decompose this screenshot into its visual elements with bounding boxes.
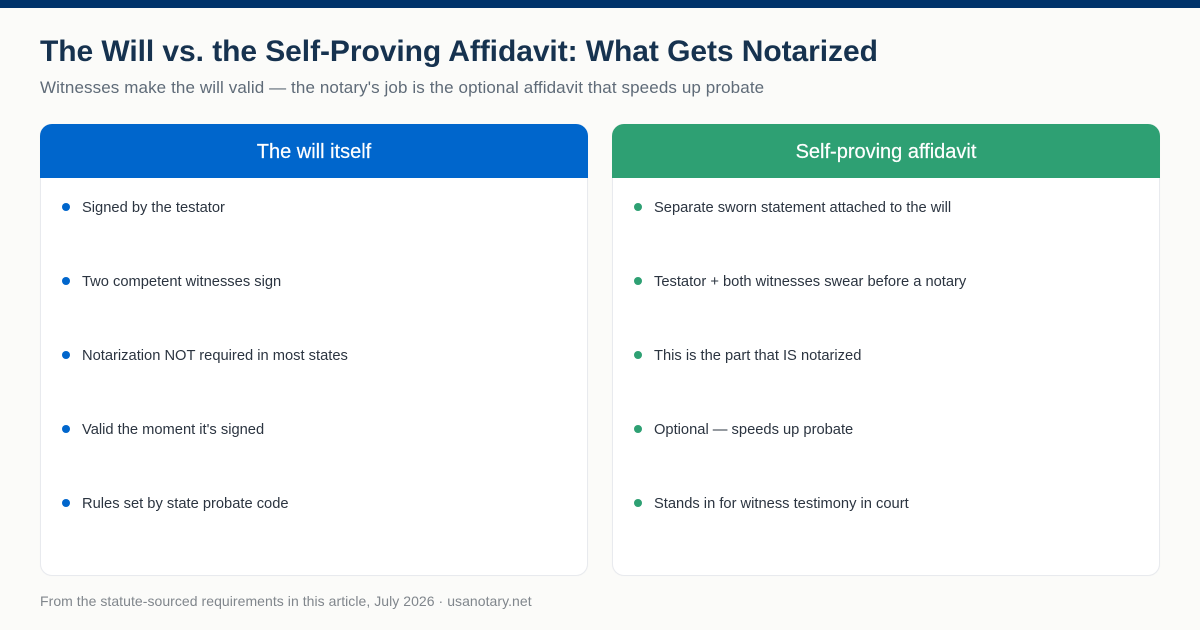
bullet: optional: Optional — speeds up probate [654,422,853,438]
bullet: valid when signed: Valid the moment it's signed [82,422,264,438]
panel: the will itself [40,124,588,576]
title: The Will vs. the Self-Proving Affidavit: What Gets Notarized [40,35,878,68]
panel heading: self-proving affidavit: Self-proving affidavit [796,141,976,163]
panel: self-proving affidavit [612,124,1160,576]
bullet: signed by testator: Signed by the testator [82,200,225,216]
bullet: state probate code: Rules set by state probate code [82,496,289,512]
panel heading: the will itself [40,124,588,178]
bullet: part that is notarized: This is the part that IS notarized [654,348,861,364]
bullet: testator and witnesses swear: Testator + both witnesses swear before a notary [654,274,966,290]
bullet: replaces testimony: Stands in for witness testimony in court [654,496,909,512]
top bar [0,0,1200,8]
panel heading: self-proving affidavit [612,124,1160,178]
panel heading: the will itself: The will itself [257,141,371,163]
bullet: separate sworn statement: Separate sworn statement attached to the will [654,200,951,216]
subtitle: Witnesses make the will valid — the notary's job is the optional affidavit that speeds up probate [40,78,764,97]
bullet: two witnesses: Two competent witnesses sign [82,274,281,290]
footer source note: From the statute-sourced requirements in this article, July 2026 · usanotary.net [40,593,532,609]
bullet: notarization not required: Notarization NOT required in most states [82,348,348,364]
